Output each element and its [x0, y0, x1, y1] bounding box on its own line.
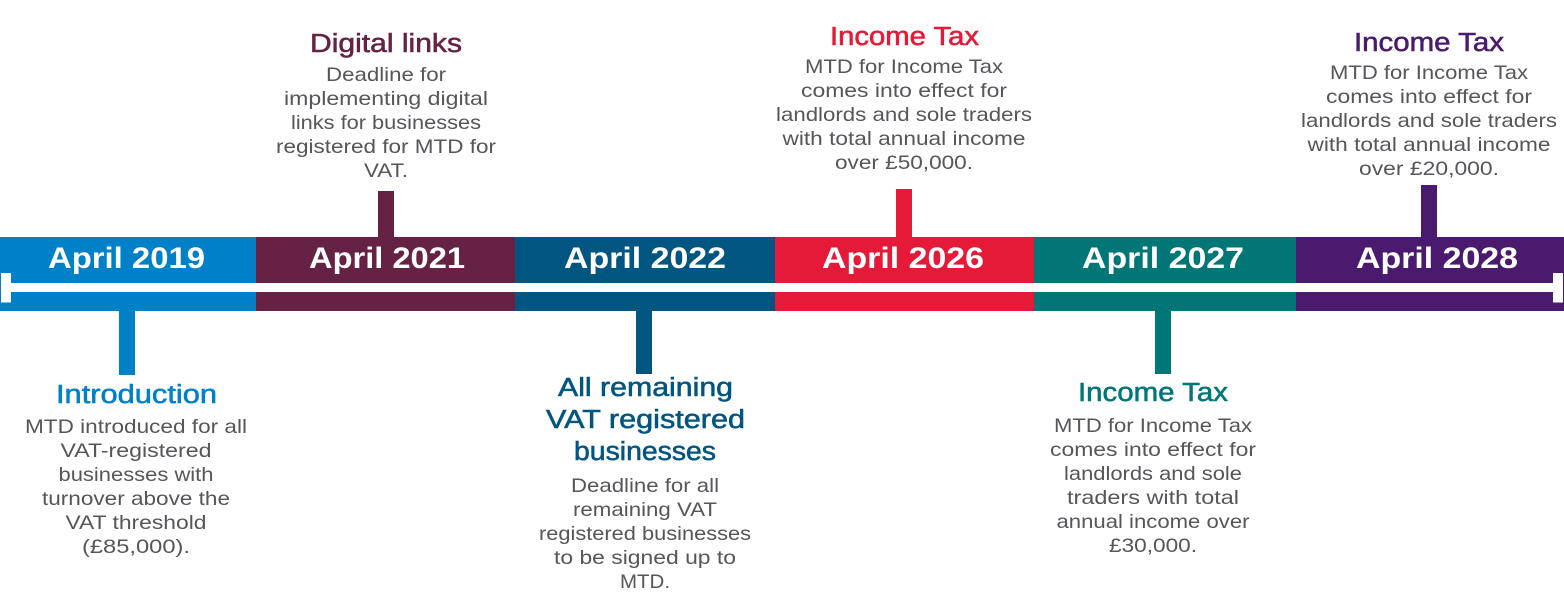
description: All remaining VAT registered businesses: MTD.: [620, 571, 670, 593]
heading: All remaining VAT registered businesses: [546, 374, 745, 466]
text block: All remaining VAT registered businesses: [539, 374, 751, 593]
segment: April 2022: April 2022: [564, 242, 726, 275]
description: Income Tax (2026): [776, 56, 1032, 174]
segment: April 2027: April 2027: [1082, 242, 1244, 275]
description: Digital links: links for businesses: [291, 112, 481, 134]
description: Digital links: [276, 64, 497, 182]
segment: April 2019: [0, 237, 256, 311]
description: Income Tax (2026): with total annual income: [781, 128, 1026, 150]
description: Introduction: [25, 416, 247, 558]
description: Introduction: (£85,000).: [82, 536, 190, 558]
description: Income Tax (2027): traders with total: [1067, 487, 1239, 509]
description: Income Tax (2027): £30,000.: [1109, 535, 1197, 557]
segment: April 2022: [515, 237, 775, 311]
description: Digital links: VAT.: [364, 160, 408, 182]
stem: April 2019: [119, 311, 135, 375]
description: Introduction: businesses with: [58, 464, 213, 486]
description: Introduction: MTD introduced for all: [25, 416, 247, 438]
stem: April 2022: [636, 311, 652, 374]
description: Income Tax (2027): MTD for Income Tax: [1054, 415, 1252, 437]
description: Digital links: implementing digital: [284, 88, 488, 110]
description: Income Tax (2026): over £50,000.: [835, 152, 973, 174]
description: Income Tax (2027): [1050, 415, 1257, 557]
description: Digital links: registered for MTD for: [276, 136, 497, 158]
heading: Income Tax (2027): Income Tax: [1078, 379, 1228, 407]
heading: All remaining VAT registered businesses: All remaining: [558, 374, 733, 402]
segment: April 2021: April 2021: [309, 242, 465, 275]
description: Income Tax (2026): MTD for Income Tax: [805, 56, 1003, 78]
description: All remaining VAT registered businesses: registered businesses: [539, 523, 751, 545]
description: Income Tax (2028): over £20,000.: [1359, 158, 1499, 180]
heading: All remaining VAT registered businesses: VAT registered: [546, 406, 745, 434]
segment: April 2028: April 2028: [1356, 242, 1518, 275]
heading: Digital links: Digital links: [310, 30, 462, 58]
segment: April 2021: [256, 237, 515, 311]
text block: Income Tax over £50,000: [776, 23, 1032, 174]
description: Income Tax (2028): with total annual income: [1306, 134, 1550, 156]
segment: April 2026: [775, 237, 1034, 311]
timeline bar: [0, 237, 1564, 311]
stem: April 2027: [1155, 311, 1171, 374]
white axis line with end caps: [1, 273, 1563, 302]
heading: Income Tax (2028): Income Tax: [1354, 29, 1504, 57]
segment: April 2026: April 2026: [822, 242, 984, 275]
stem: April 2028: [1421, 185, 1437, 237]
heading: Income Tax (2026): Income Tax: [830, 23, 979, 51]
stem: April 2026: [896, 189, 912, 237]
description: Income Tax (2027): comes into effect for: [1050, 439, 1257, 461]
description: Income Tax (2026): comes into effect for: [801, 80, 1008, 102]
description: Introduction: turnover above the: [42, 488, 230, 510]
description: All remaining VAT registered businesses: to be signed up to: [554, 547, 736, 569]
heading: All remaining VAT registered businesses: businesses: [574, 438, 716, 466]
description: Introduction: VAT-registered: [60, 440, 212, 462]
description: Digital links: Deadline for: [326, 64, 447, 86]
description: All remaining VAT registered businesses: remaining VAT: [573, 499, 717, 521]
stem: April 2021: [378, 191, 394, 237]
segment: April 2028: [1296, 237, 1564, 311]
description: Income Tax (2028): comes into effect for: [1326, 86, 1533, 108]
description: All remaining VAT registered businesses: Deadline for all: [571, 475, 719, 497]
description: Introduction: VAT threshold: [66, 512, 206, 534]
description: Income Tax (2027): annual income over: [1056, 511, 1250, 533]
description: Income Tax (2028): landlords and sole traders: [1301, 110, 1557, 132]
text block: Income Tax over £20,000: [1301, 29, 1557, 180]
description: Income Tax (2028): [1301, 62, 1557, 180]
text block: Introduction: [25, 381, 247, 558]
segment: April 2019: April 2019: [48, 242, 205, 275]
description: Income Tax (2028): MTD for Income Tax: [1330, 62, 1528, 84]
heading: Introduction: Introduction: [56, 381, 217, 409]
text block: Digital links: [276, 30, 497, 182]
description: Income Tax (2026): landlords and sole traders: [776, 104, 1032, 126]
text block: Income Tax over £30,000: [1050, 379, 1257, 557]
segment: April 2027: [1034, 237, 1296, 311]
description: All remaining VAT registered businesses: [539, 475, 751, 593]
description: Income Tax (2027): landlords and sole: [1064, 463, 1242, 485]
